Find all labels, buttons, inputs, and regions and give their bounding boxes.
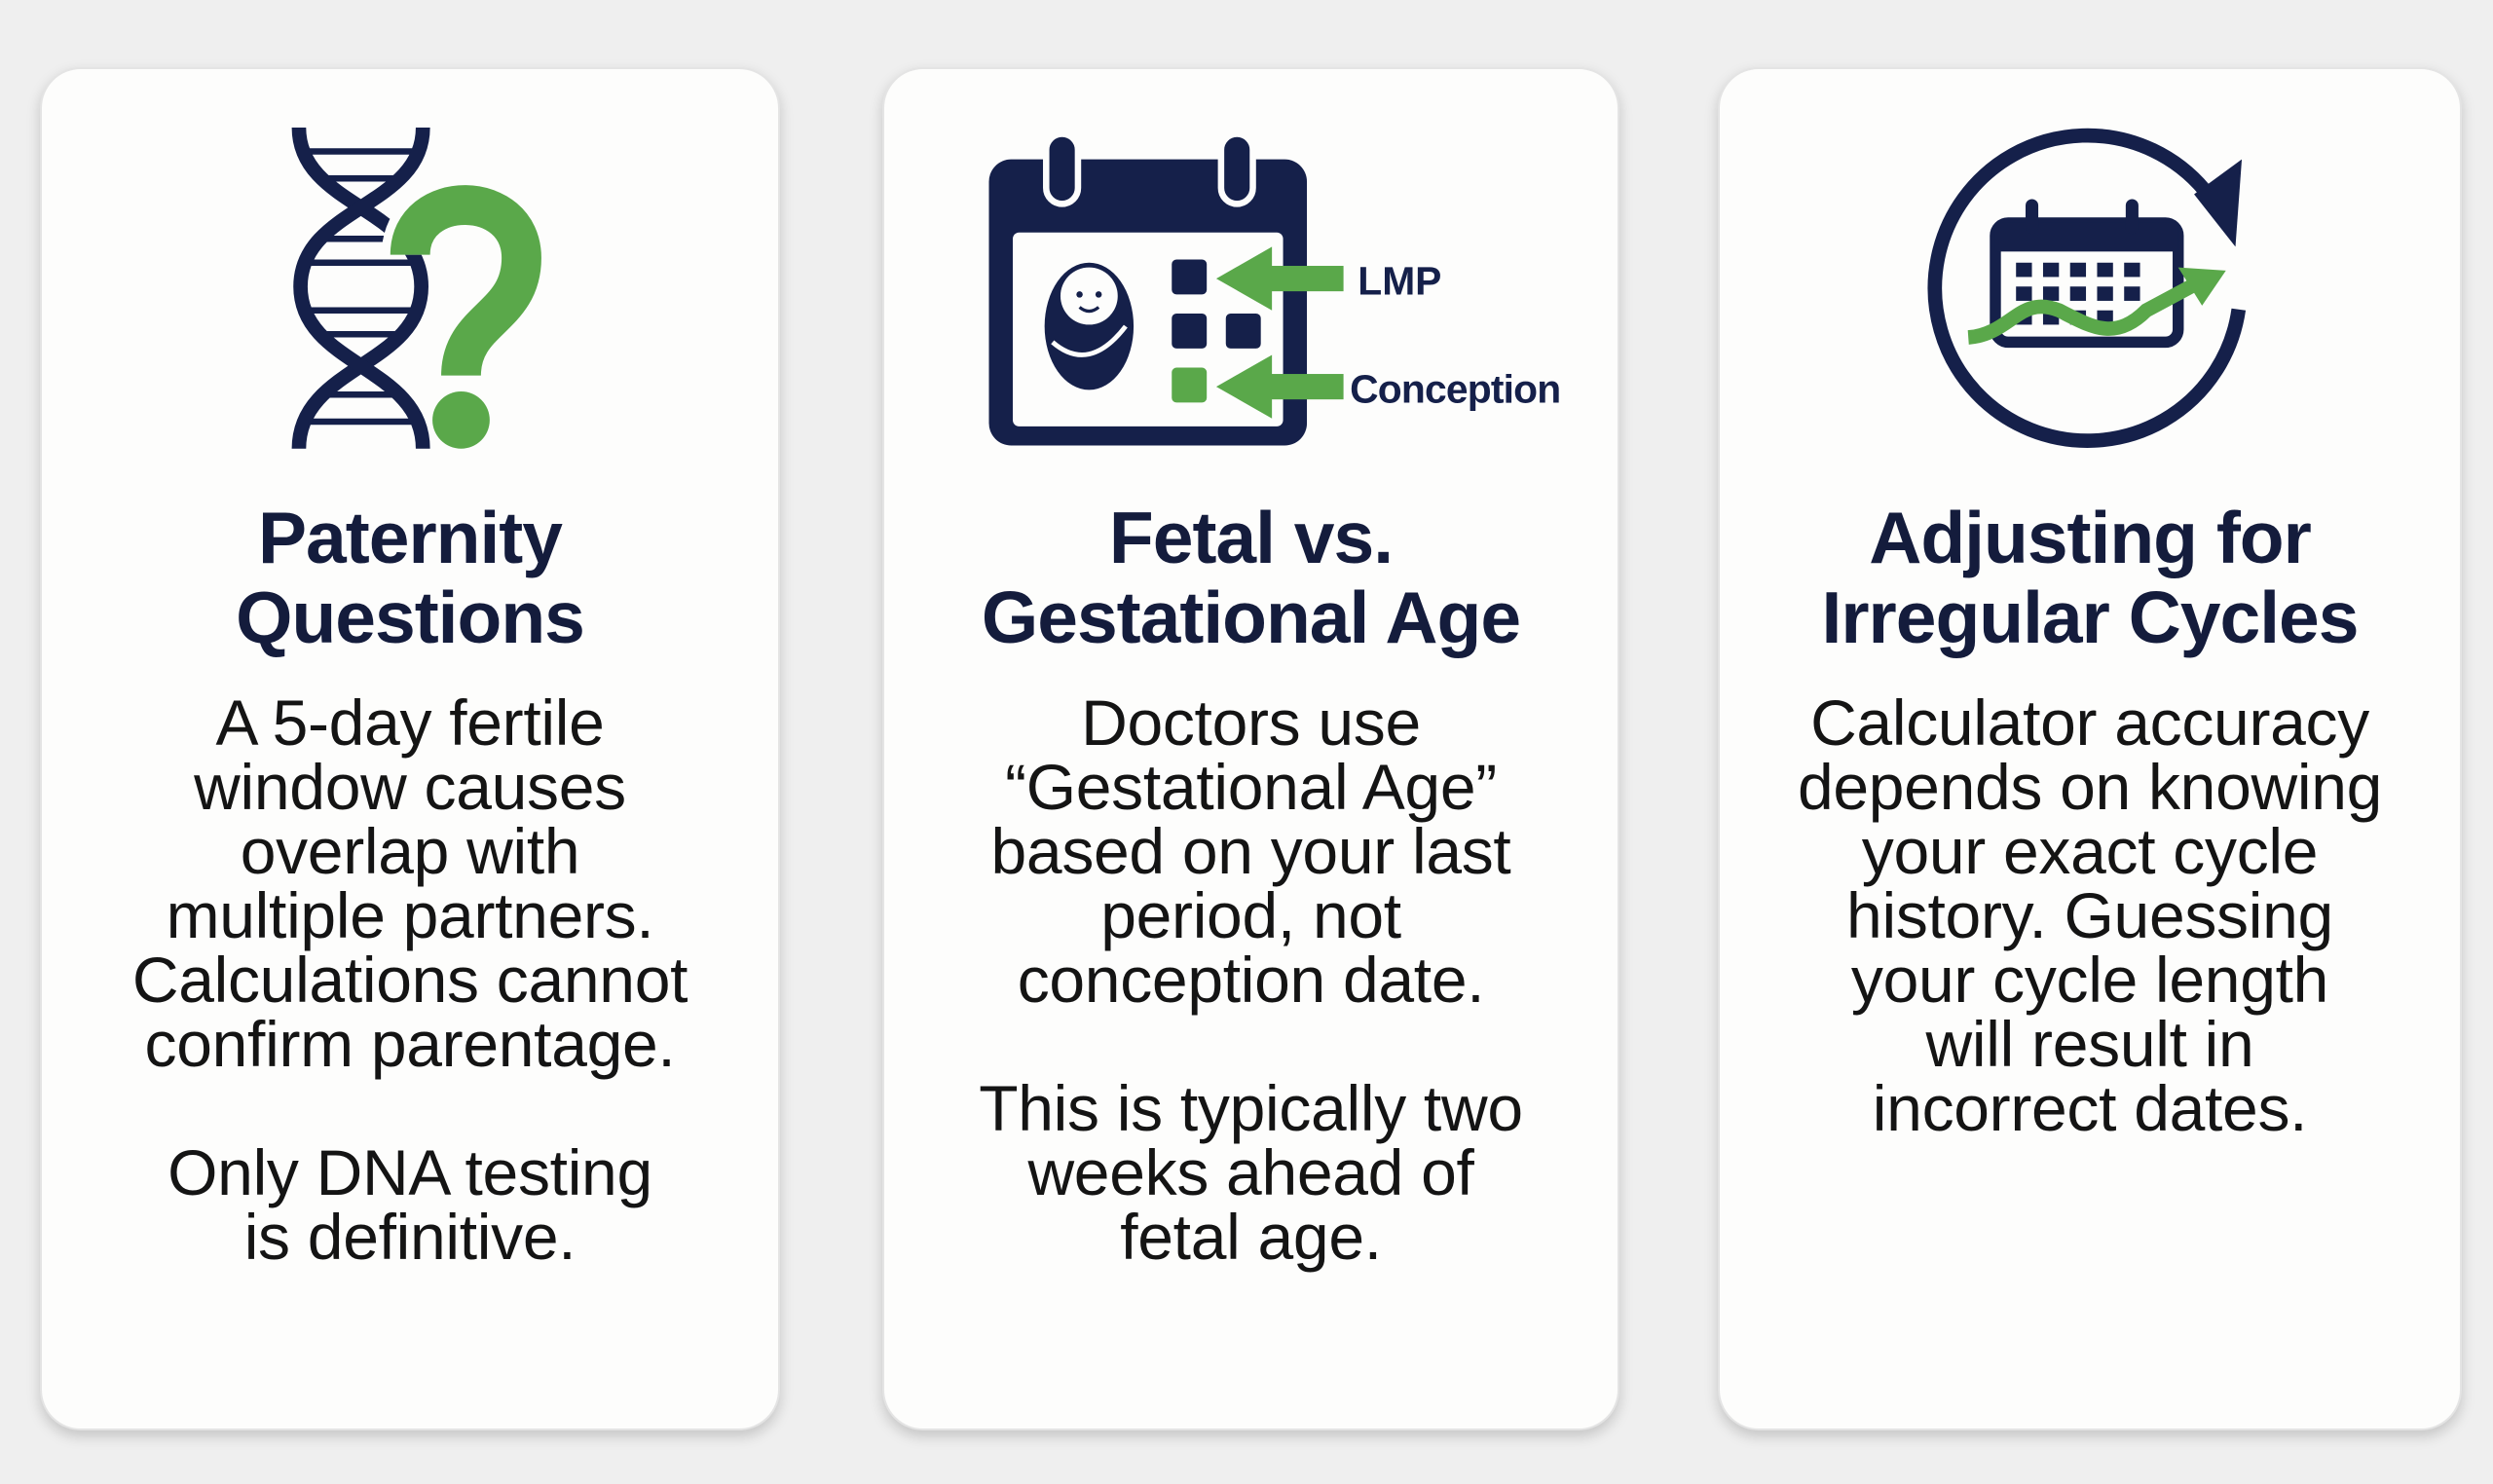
- text: irregular body: Calculator accuracy: [1810, 686, 2369, 759]
- icon: dna with question mark: [299, 128, 522, 449]
- icon: calendar with LMP and conception: Conception: [1350, 366, 1560, 411]
- text: irregular body: incorrect dates.: [1873, 1072, 2307, 1144]
- panel: paternity questions: [40, 67, 780, 1430]
- heading: irregular: Irregular Cycles: [1822, 576, 2358, 658]
- text: fetal body: Doctors use: [1081, 686, 1421, 759]
- text: paternity body: [132, 686, 688, 1273]
- text: fetal body: This is typically two: [979, 1072, 1523, 1144]
- icon: cycle calendar with arrow: [1935, 135, 2242, 441]
- text: irregular body: [1798, 686, 2382, 1144]
- text: irregular body: your cycle length: [1851, 944, 2328, 1016]
- heading: fetal: Fetal vs.: [1109, 497, 1393, 578]
- text: paternity body: A 5-day fertile: [215, 686, 605, 759]
- heading: paternity: [236, 497, 584, 658]
- text: irregular body: will result in: [1926, 1008, 2253, 1080]
- heading: irregular: [1822, 497, 2358, 658]
- heading: irregular: Adjusting for: [1869, 497, 2311, 578]
- text: paternity body: confirm parentage.: [145, 1008, 675, 1080]
- text: fetal body: based on your last: [991, 815, 1510, 887]
- text: paternity body: Only DNA testing: [167, 1136, 652, 1208]
- text: paternity body: is definitive.: [244, 1201, 576, 1273]
- text: fetal body: [979, 686, 1523, 1273]
- heading: paternity: Paternity: [258, 497, 562, 578]
- text: fetal body: weeks ahead of: [1027, 1136, 1474, 1208]
- panel: fetal vs gestational age: [882, 67, 1619, 1430]
- heading: fetal: [982, 497, 1520, 658]
- text: irregular body: depends on knowing: [1798, 751, 2382, 823]
- icon: calendar with LMP and conception: [989, 134, 1560, 446]
- text: fetal body: fetal age.: [1120, 1201, 1382, 1273]
- text: paternity body: Calculations cannot: [132, 944, 688, 1016]
- text: paternity body: window causes: [194, 751, 626, 823]
- panel: irregular cycles: [1718, 67, 2462, 1430]
- text: paternity body: overlap with: [241, 815, 579, 887]
- heading: fetal: Gestational Age: [982, 576, 1520, 658]
- text: paternity body: multiple partners.: [167, 879, 653, 951]
- text: fetal body: conception date.: [1018, 944, 1484, 1016]
- icon: calendar with LMP and conception: LMP: [1358, 258, 1441, 303]
- heading: paternity: Questions: [236, 576, 584, 658]
- text: fetal body: “Gestational Age”: [1005, 751, 1497, 823]
- text: fetal body: period, not: [1100, 879, 1401, 951]
- text: irregular body: your exact cycle: [1862, 815, 2318, 887]
- text: irregular body: history. Guessing: [1846, 879, 2333, 951]
